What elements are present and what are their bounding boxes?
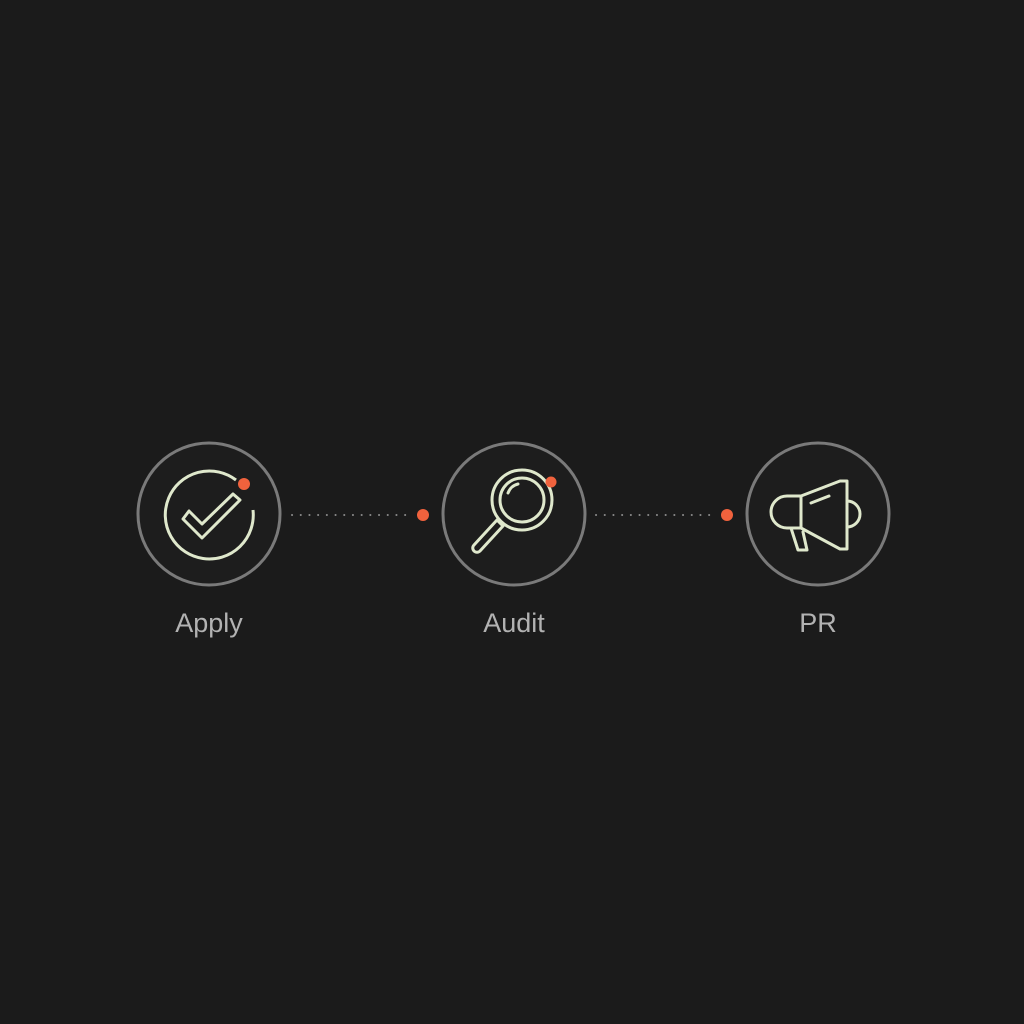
step: Audit [443, 443, 585, 638]
connector: audit to PR [596, 509, 733, 521]
icon: check circle [165, 471, 253, 559]
step: Apply [138, 443, 280, 638]
label: Apply: Apply [175, 608, 243, 638]
icon: magnifier [473, 470, 556, 552]
label: Audit: Audit [483, 608, 545, 638]
label: PR: PR [799, 608, 837, 638]
connector: apply to audit [292, 509, 429, 521]
step: PR [747, 443, 889, 638]
icon: megaphone [771, 481, 860, 550]
